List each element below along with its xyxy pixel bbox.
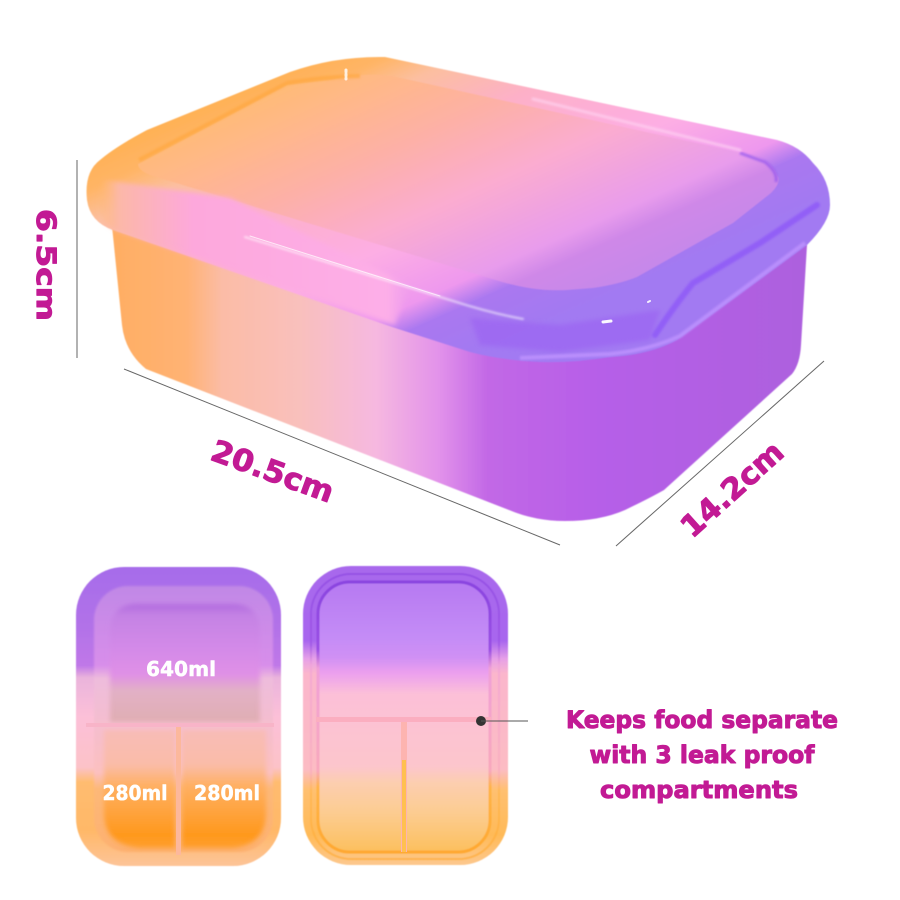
lid front band xyxy=(99,180,410,325)
callout text: compartments xyxy=(600,776,798,804)
box body xyxy=(112,226,807,521)
pointer dot xyxy=(476,716,486,726)
label: 14.2cm: 14.2cm xyxy=(674,435,791,545)
tray outer ring xyxy=(311,574,499,859)
width line xyxy=(616,361,824,546)
tray inner rim xyxy=(94,586,273,852)
lid lower light edge xyxy=(520,243,805,358)
pointer line xyxy=(481,720,528,722)
lid lower purple stripe xyxy=(655,205,817,335)
height line xyxy=(76,160,78,358)
left tray with capacities xyxy=(76,567,281,866)
capacity 280ml right: 280ml xyxy=(194,781,260,805)
lid highlights xyxy=(245,70,740,322)
lunch box with lid xyxy=(87,57,830,521)
length line xyxy=(124,369,560,545)
lid right groove xyxy=(740,153,776,182)
tray outer xyxy=(303,566,508,865)
tray dividers xyxy=(316,717,491,722)
tray dividers xyxy=(86,723,274,727)
tray outer xyxy=(76,567,281,866)
label: 20.5cm: 20.5cm xyxy=(206,434,338,510)
callout pointer xyxy=(476,716,528,726)
capacity 280ml left: 280ml xyxy=(102,781,168,805)
lid shaded front corner xyxy=(470,310,660,352)
lid groove xyxy=(139,76,360,160)
callout text xyxy=(566,706,838,804)
lid top panel xyxy=(138,75,779,290)
right tray xyxy=(303,566,508,865)
capacity 640ml: 640ml xyxy=(146,657,216,681)
tray inner ring xyxy=(318,582,490,852)
callout text: with 3 leak proof xyxy=(590,741,815,769)
label: 6.5cm: 6.5cm xyxy=(30,209,61,321)
lid rim xyxy=(87,57,830,362)
tray compartments xyxy=(104,604,266,848)
callout text: Keeps food separate xyxy=(566,706,838,734)
